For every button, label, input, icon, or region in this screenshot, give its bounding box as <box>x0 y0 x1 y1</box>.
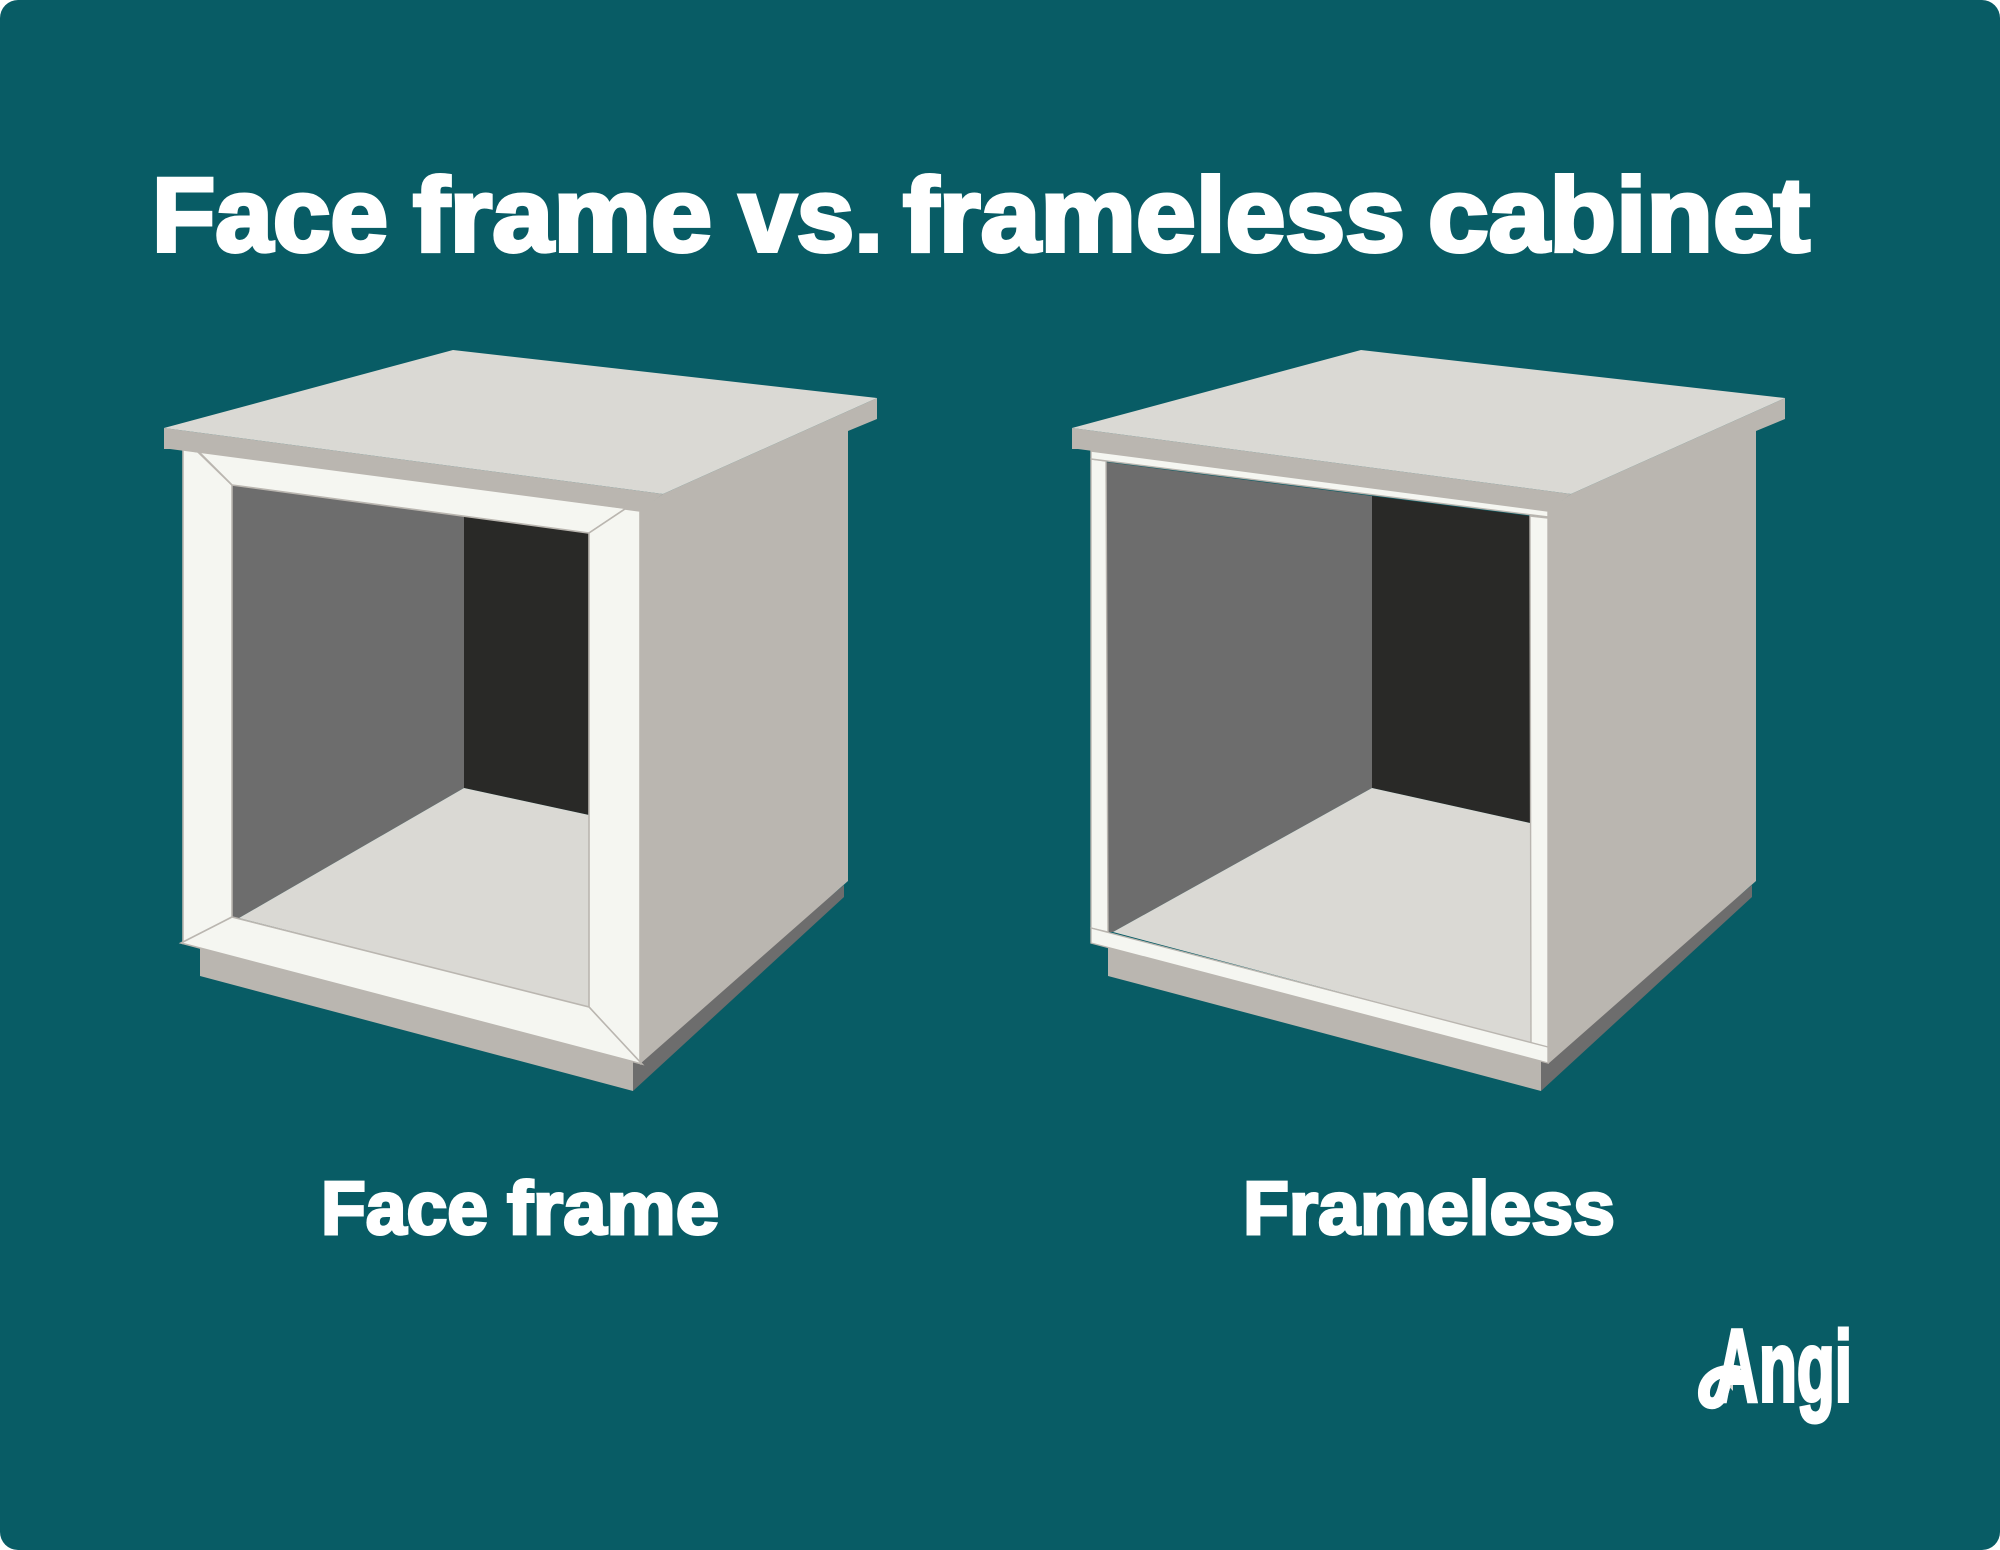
side panel <box>640 398 877 1064</box>
title: frameless <box>903 157 1405 274</box>
logo: Angi: ngi <box>1759 1311 1852 1423</box>
interior back wall <box>1372 496 1530 823</box>
interior floor <box>239 788 589 1007</box>
label: face frame <box>321 1166 719 1250</box>
interior left wall <box>231 484 464 918</box>
face frame rails and stiles <box>181 449 642 1064</box>
title: cabinet <box>1428 157 1810 274</box>
label: face frame: Face <box>321 1166 488 1250</box>
interior back wall <box>464 516 589 815</box>
base plinth <box>200 885 844 1091</box>
title <box>152 157 1810 274</box>
countertop <box>164 350 877 494</box>
interior floor <box>1113 788 1531 1043</box>
countertop <box>1072 350 1785 494</box>
title: frame <box>413 157 712 274</box>
logo: Angi: A <box>1716 1308 1758 1423</box>
side panel <box>1548 398 1785 1064</box>
logo: Angi <box>1704 1308 1852 1423</box>
countertop front edge <box>164 428 663 511</box>
base plinth <box>1108 885 1752 1091</box>
thin cabinet edges <box>1091 451 1548 1063</box>
label: frameless: Frameless <box>1243 1166 1615 1250</box>
title: Face <box>152 157 388 274</box>
label: face frame: frame <box>507 1166 719 1250</box>
interior left wall <box>1106 462 1372 932</box>
title: vs. <box>739 157 883 274</box>
cabinet: face frame <box>164 350 877 1091</box>
countertop front edge <box>1072 428 1571 511</box>
cabinet: frameless <box>1072 350 1785 1091</box>
